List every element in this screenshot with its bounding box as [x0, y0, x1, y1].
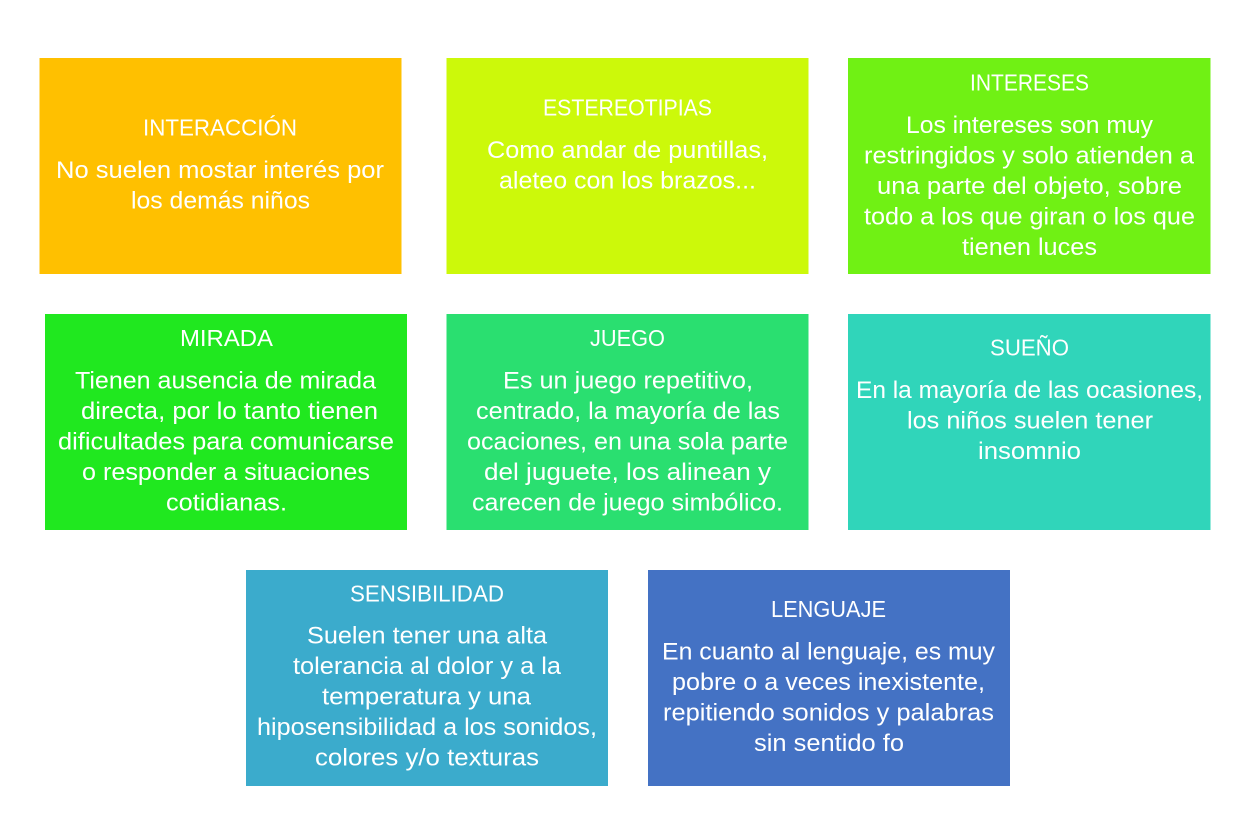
text: sueño [856, 377, 1203, 465]
text: mirada: o responder a situaciones [82, 459, 370, 486]
text: lenguaje: repitiendo sonidos y palabras [663, 700, 994, 726]
text: interacción [56, 157, 384, 214]
panel: lenguaje [648, 570, 1010, 786]
text: sensibilidad: hiposensibilidad a los sonidos, [257, 714, 597, 741]
text: juego [467, 368, 788, 516]
text: intereses: tienen luces [962, 234, 1097, 261]
text: mirada: cotidianas. [166, 490, 287, 516]
text: sueño: insomnio [978, 438, 1081, 465]
text: lenguaje [662, 638, 996, 757]
heading: lenguaje: LENGUAJE [771, 596, 886, 622]
text: intereses: todo a los que giran o los que [864, 204, 1195, 230]
text: sensibilidad [257, 622, 597, 772]
text: sensibilidad: temperatura y una [322, 684, 531, 710]
panel: juego [446, 314, 808, 530]
panel: sensibilidad [246, 570, 608, 786]
text: juego: centrado, la mayoría de las [476, 398, 780, 425]
panel: mirada [45, 314, 407, 530]
text: sensibilidad: Suelen tener una alta [307, 622, 547, 650]
text: intereses: restringidos y solo atienden a [864, 142, 1194, 170]
text: lenguaje: En cuanto al lenguaje, es muy [662, 638, 996, 666]
text: mirada: directa, por lo tanto tienen [81, 398, 378, 425]
heading: interacción: INTERACCIÓN [143, 114, 297, 140]
text: mirada: Tienen ausencia de mirada [75, 368, 376, 394]
text: intereses: una parte del objeto, sobre [877, 173, 1182, 200]
panel: interacción [40, 58, 402, 274]
text: juego: Es un juego repetitivo, [503, 368, 753, 394]
text: sensibilidad: colores y/o texturas [315, 744, 539, 772]
text: lenguaje: pobre o a veces inexistente, [672, 669, 985, 696]
heading: juego: JUEGO [590, 325, 665, 351]
text: sensibilidad: tolerancia al dolor y a la [293, 653, 561, 680]
text: juego: ocaciones, en una sola parte [467, 428, 788, 456]
text: estereotipias: aleteo con los brazos... [499, 168, 756, 194]
text: juego: carecen de juego simbólico. [472, 490, 783, 516]
text: mirada [58, 368, 394, 516]
text: mirada: dificultades para comunicarse [58, 428, 394, 456]
heading: estereotipias: ESTEREOTIPIAS [543, 94, 712, 120]
heading: intereses: INTERESES [970, 70, 1089, 96]
text: intereses [864, 112, 1195, 261]
heading: sueño: SUEÑO [990, 334, 1069, 360]
text: interacción: No suelen mostar interés por [56, 157, 384, 184]
text: sueño: los niños suelen tener [907, 408, 1153, 434]
text: juego: del juguete, los alinean y [484, 459, 772, 486]
heading: mirada: MIRADA [180, 325, 273, 351]
text: estereotipias: Como andar de puntillas, [487, 137, 768, 164]
panel: estereotipias [446, 58, 808, 274]
text: interacción: los demás niños [131, 188, 310, 214]
text: lenguaje: sin sentido fo [754, 730, 904, 757]
text: sueño: En la mayoría de las ocasiones, [856, 377, 1203, 404]
heading: sensibilidad: SENSIBILIDAD [350, 580, 504, 606]
text: estereotipias [487, 137, 768, 194]
panel: intereses [848, 58, 1210, 274]
panel: sueño [848, 314, 1210, 530]
text: intereses: Los intereses son muy [906, 112, 1154, 139]
